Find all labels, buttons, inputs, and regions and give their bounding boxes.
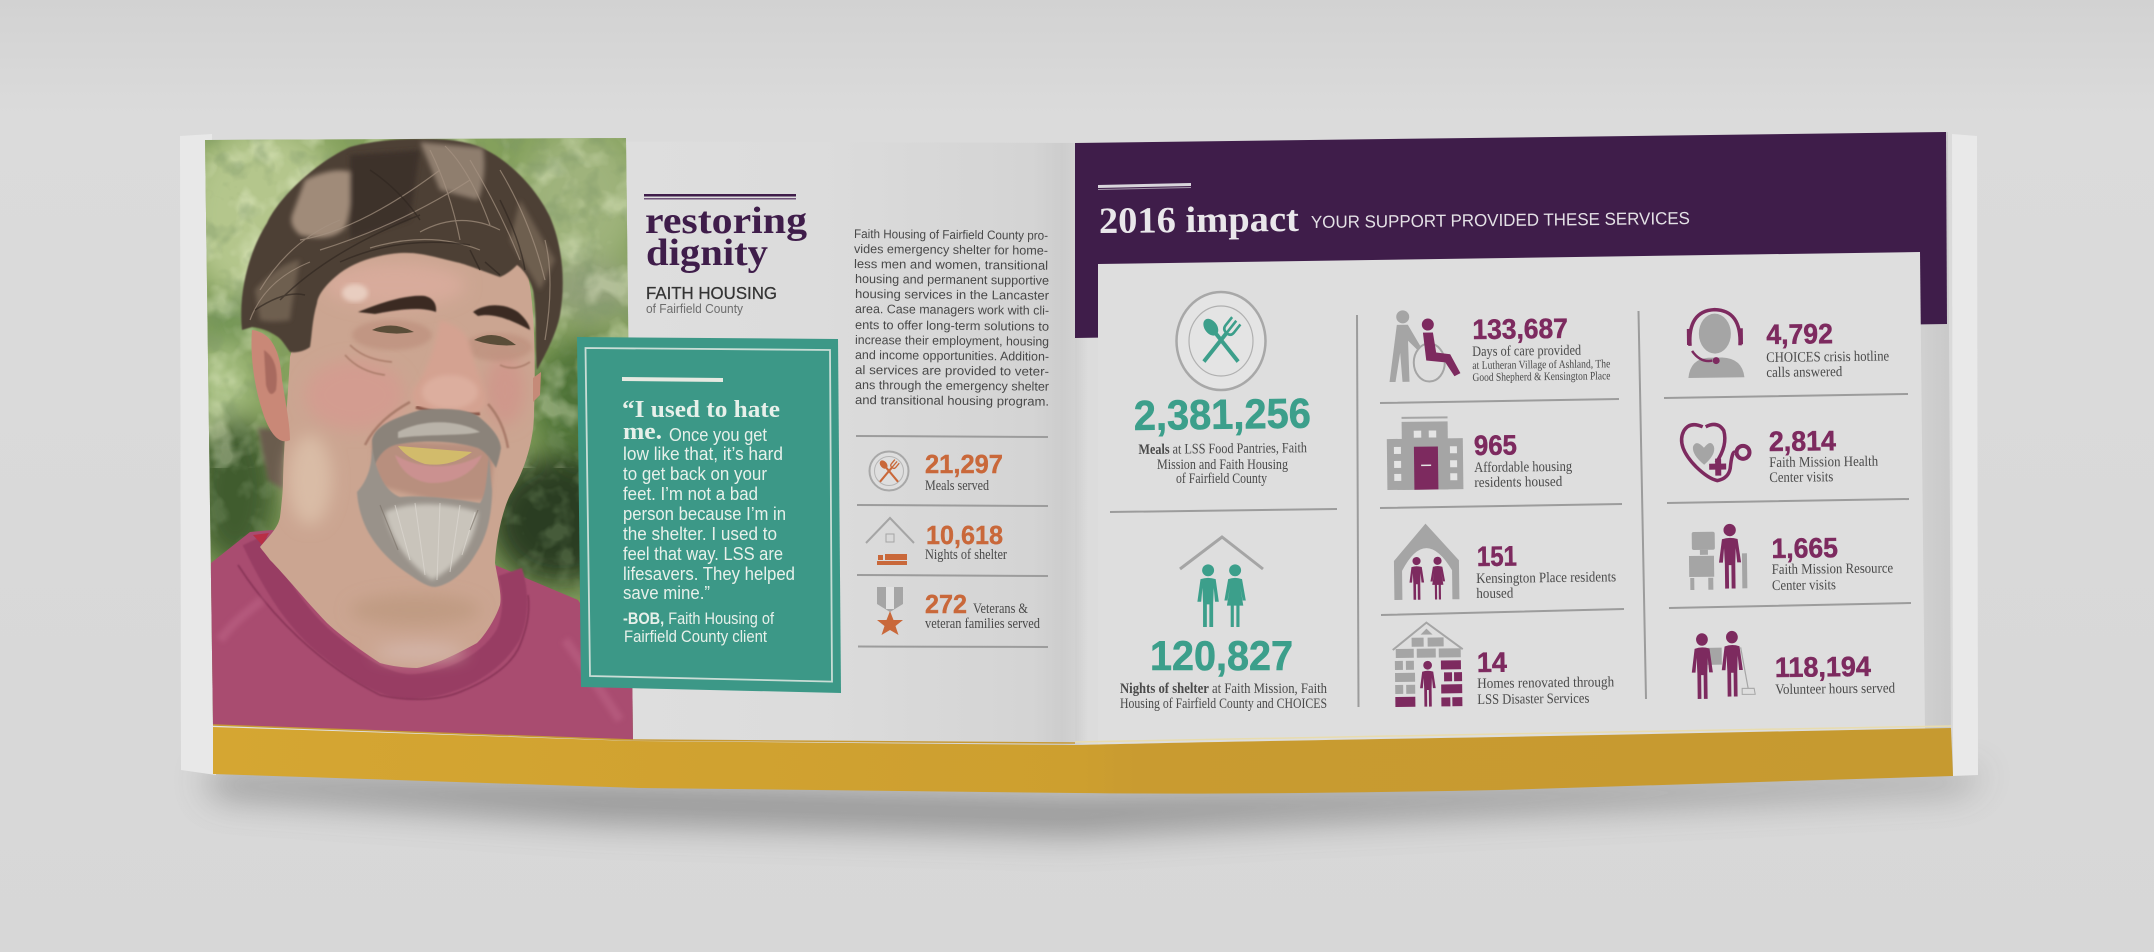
- stat: days of care: [1389, 308, 1611, 385]
- nose: [416, 325, 480, 412]
- quote rule: [622, 377, 723, 382]
- stat: health center: [1681, 422, 1879, 487]
- body text: vides emergency shelter for home-: [854, 242, 1048, 258]
- stat: affordable housing: residents housed: [1474, 474, 1563, 491]
- body text: housing and permanent supportive: [855, 272, 1049, 288]
- icon: building: [1387, 416, 1463, 490]
- stat: affordable housing: [1387, 415, 1572, 492]
- stat: crisis hotline: 4,792: [1766, 318, 1833, 350]
- stat: meals: of Fairfield County: [1176, 471, 1268, 487]
- icon: medal: [877, 587, 903, 635]
- stat rules left: [856, 436, 1048, 647]
- stat: crisis hotline: calls answered: [1766, 364, 1843, 381]
- goatee: [357, 448, 492, 587]
- stat: days of care: 133,687: [1472, 313, 1568, 345]
- eyebrows: [358, 296, 436, 314]
- heading rule: [644, 194, 796, 200]
- stat: health center: Faith Mission Health: [1769, 454, 1879, 471]
- subheading: Faith Housing: of Fairfield County: [646, 301, 743, 316]
- stat: resource center: Center visits: [1772, 577, 1836, 594]
- body text: Faith Housing of Fairfield County pro-: [854, 227, 1048, 243]
- smile folds: [365, 402, 508, 448]
- stat: days of care: Days of care provided: [1472, 343, 1582, 360]
- stat: affordable housing: Affordable housing: [1474, 459, 1572, 476]
- icon: plate: [1176, 292, 1266, 390]
- book shadow: [205, 772, 1985, 835]
- stat: homes renovated: LSS Disaster Services: [1477, 691, 1590, 708]
- stat: health center: 2,814: [1769, 425, 1836, 457]
- teeth: [398, 446, 472, 465]
- stat: meals: 2,381,256: [1133, 390, 1311, 439]
- body text: al services are provided to veter-: [855, 363, 1049, 379]
- row rules: [1110, 394, 1911, 615]
- column dividers: [1357, 311, 1646, 707]
- icon: arch with residents: [1393, 523, 1459, 600]
- eye sockets: [352, 320, 432, 350]
- icon: person at computer: [1689, 524, 1747, 590]
- stat: homes renovated: Homes renovated through: [1477, 674, 1615, 692]
- stat: meals served: [870, 449, 1003, 494]
- quote text: person because I’m in: [623, 504, 786, 524]
- quote text: [622, 397, 795, 646]
- stat: nights of shelter: Nights of shelter at Faith Mission, Faith: [1120, 681, 1328, 697]
- stat: meals served: 21,297: [925, 449, 1003, 479]
- shirt: [205, 530, 640, 745]
- panel: teal quote box: [577, 337, 841, 693]
- quote text: “I used to hate: [622, 397, 780, 423]
- quote text: -BOB, Faith Housing of: [623, 610, 774, 628]
- icon: house and bed: [866, 518, 914, 565]
- stat: crisis hotline: CHOICES crisis hotline: [1766, 348, 1889, 366]
- yellow footer band: [213, 726, 1953, 794]
- ear: [251, 330, 290, 441]
- subheading: YOUR SUPPORT PROVIDED THESE SERVICES: [1311, 208, 1690, 232]
- body text: housing services in the Lancaster: [855, 287, 1049, 303]
- body text: and transitional housing program.: [855, 393, 1049, 409]
- hair behind ear: [258, 428, 286, 490]
- icon: headset operator: [1687, 309, 1744, 378]
- subheading: Faith Housing: FAITH HOUSING: [646, 283, 777, 303]
- heading: 2016 impact: 2016 impact: [1099, 199, 1300, 242]
- stat: homes renovated: [1392, 620, 1615, 709]
- heading: restoring dignity: [645, 200, 807, 274]
- hair: [241, 139, 563, 370]
- neck and face skin: [260, 250, 535, 668]
- quote text: Fairfield County client: [624, 628, 767, 646]
- subheading: Faith Housing: [646, 283, 777, 316]
- body text: less men and women, transitional: [854, 257, 1048, 273]
- lower lip: [395, 455, 482, 483]
- quote text: to get back on your: [623, 464, 767, 484]
- moustache: [372, 409, 501, 470]
- heading: restoring dignity: restoring: [645, 200, 807, 242]
- stat: Kensington Place: housed: [1476, 586, 1514, 602]
- stat: Kensington Place: Kensington Place residents: [1476, 569, 1617, 587]
- stat: meals: Meals at LSS Food Pantries, Faith: [1138, 440, 1308, 458]
- body text: [854, 227, 1049, 409]
- stat: volunteer hours: [1691, 629, 1896, 699]
- eye wrinkles: [345, 345, 530, 375]
- stat: meals served: Meals served: [925, 478, 990, 494]
- stat: nights of shelter: [866, 518, 1007, 565]
- panel: left page: [185, 125, 1075, 750]
- quote text: save mine.”: [623, 583, 710, 603]
- icon: roof with two people: [1180, 537, 1263, 627]
- icon: brick house: [1392, 622, 1463, 707]
- stat: veterans: 272: [925, 589, 967, 619]
- stat: homes renovated: 14: [1477, 647, 1507, 678]
- icon: plate: [870, 452, 908, 490]
- stat: days of care: Good Shepherd & Kensington Place: [1472, 370, 1611, 384]
- stat: veterans: veteran families served: [925, 616, 1041, 632]
- icon: wheelchair: [1389, 310, 1461, 382]
- stat: resource center: Faith Mission Resource: [1772, 561, 1893, 578]
- back cover strip left: [180, 134, 216, 775]
- stat: health center: Center visits: [1769, 469, 1834, 486]
- icon: volunteers: [1691, 631, 1755, 699]
- stat: volunteer hours: Volunteer hours served: [1775, 681, 1896, 698]
- stat: nights of shelter: [1120, 537, 1328, 712]
- stat: nights of shelter: 120,827: [1150, 632, 1293, 679]
- body text: area. Case managers work with cli-: [855, 302, 1049, 318]
- quote text: feet. I’m not a bad: [623, 484, 758, 504]
- stat: nights of shelter: Nights of shelter: [925, 547, 1007, 563]
- body text: increase their employment, housing: [855, 333, 1049, 349]
- stat: veterans: Veterans &: [973, 601, 1029, 617]
- stat: affordable housing: 965: [1474, 429, 1517, 461]
- quote text: me.: [623, 419, 662, 445]
- quote text: lifesavers. They helped: [623, 564, 795, 584]
- body text: ents to offer long-term solutions to: [855, 318, 1049, 334]
- stat: nights of shelter: 10,618: [926, 520, 1003, 550]
- body text: and income opportunities. Addition-: [855, 348, 1049, 364]
- stat: volunteer hours: 118,194: [1775, 651, 1871, 683]
- stat: nights of shelter: Housing of Fairfield County and CHOICES: [1120, 696, 1327, 712]
- chin shading: [372, 440, 495, 500]
- quote text: the shelter. I used to: [623, 524, 777, 544]
- stat: meals: [1133, 292, 1311, 487]
- quote text: feel that way. LSS are: [623, 544, 783, 564]
- quote text: low like that, it’s hard: [623, 444, 783, 464]
- panel: right page: [1075, 132, 1951, 750]
- header rule: [1098, 183, 1191, 190]
- stat: days of care: at Lutheran Village of Ashland, The: [1472, 358, 1610, 372]
- heading: restoring dignity: dignity: [646, 232, 768, 274]
- icon: stethoscope: [1681, 424, 1750, 481]
- stat: resource center: 1,665: [1771, 532, 1838, 564]
- stat: Kensington Place: 151: [1477, 541, 1517, 572]
- photo: smiling man: [205, 138, 633, 740]
- quote text: Once you get: [669, 425, 767, 445]
- back cover strip right: [1952, 134, 1978, 776]
- white card: [1098, 252, 1925, 748]
- stat: crisis hotline: [1687, 307, 1889, 382]
- thin gold line under photo: [213, 725, 1075, 743]
- stat: resource center: [1689, 522, 1893, 595]
- purple header band: [1075, 132, 1947, 338]
- stat: veterans: [877, 587, 1041, 635]
- stat: Kensington Place: [1393, 521, 1617, 603]
- stat: meals: Mission and Faith Housing: [1157, 457, 1288, 473]
- body text: ans through the emergency shelter: [855, 378, 1049, 394]
- eyes: [372, 325, 414, 334]
